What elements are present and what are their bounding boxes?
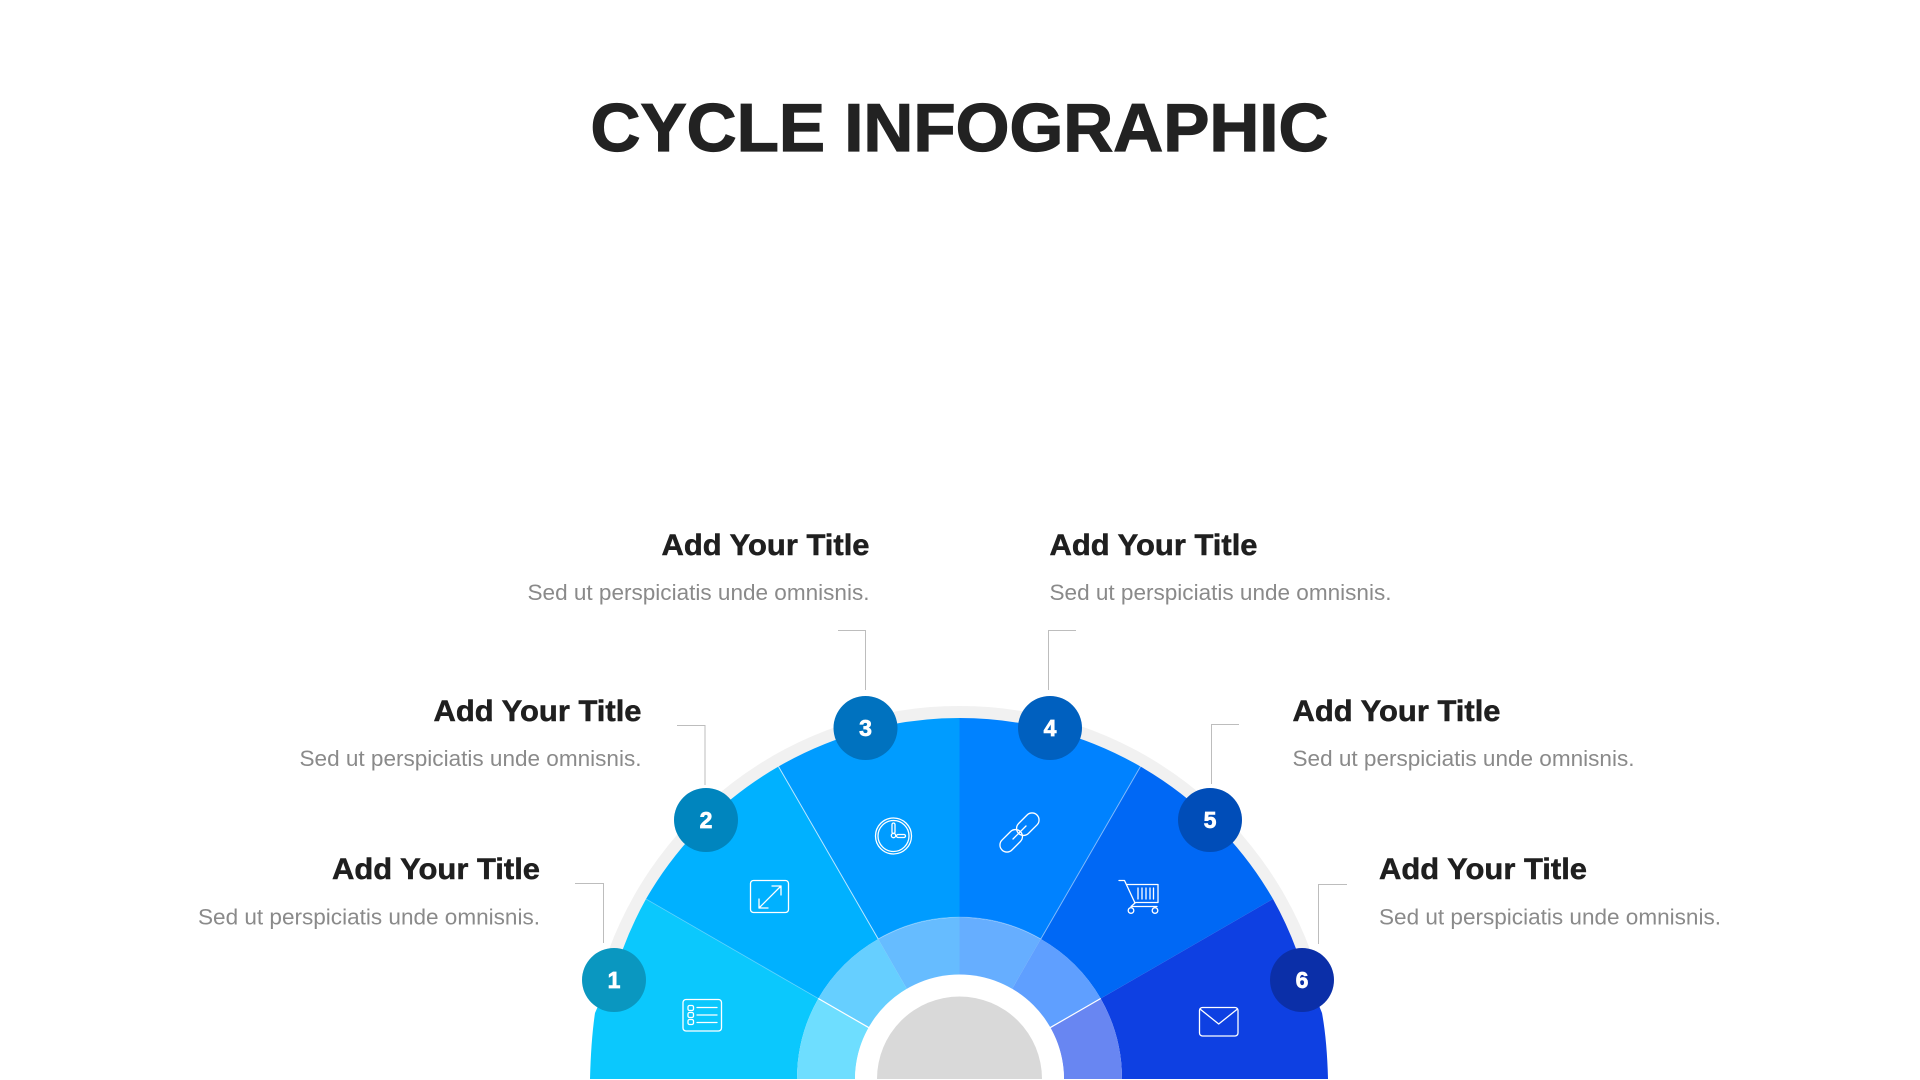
text block 4: Sed ut perspiciatis unde omnisnis. bbox=[1050, 580, 1392, 605]
segment 5 bbox=[1041, 766, 1273, 998]
icon: chain link bbox=[997, 810, 1042, 855]
text block 3 bbox=[528, 529, 870, 605]
inner ring segment 3 bbox=[878, 917, 960, 990]
text block 3: Add Your Title bbox=[662, 529, 870, 562]
segment 1 bbox=[590, 899, 818, 1079]
inner ring segment 4 bbox=[960, 917, 1041, 990]
badge 3 bbox=[834, 696, 898, 760]
badge 1 bbox=[582, 948, 646, 1012]
centre grey disc bbox=[877, 996, 1042, 1079]
segment 6 bbox=[1101, 899, 1328, 1079]
badge 5: 5 bbox=[1204, 807, 1217, 833]
text block 3: Sed ut perspiciatis unde omnisnis. bbox=[528, 580, 870, 605]
inner ring segment 2 bbox=[818, 939, 907, 1028]
text block 5: Add Your Title bbox=[1292, 695, 1500, 728]
connector 2 bbox=[677, 726, 705, 785]
text block 2: Add Your Title bbox=[434, 695, 642, 728]
centre white disc bbox=[855, 974, 1064, 1079]
text block 6: Sed ut perspiciatis unde omnisnis. bbox=[1379, 904, 1721, 930]
text block 6: Add Your Title bbox=[1379, 853, 1587, 886]
text block 1 bbox=[198, 853, 540, 930]
text block 2 bbox=[300, 695, 642, 771]
text block 4 bbox=[1050, 529, 1392, 605]
badge 4 bbox=[1018, 696, 1082, 760]
title: CYCLE INFOGRAPHIC bbox=[590, 90, 1328, 166]
connector 3 bbox=[838, 630, 866, 690]
connector 6 bbox=[1318, 884, 1347, 944]
inner ring segment 1 bbox=[797, 998, 869, 1079]
badge 5 bbox=[1178, 788, 1242, 852]
text block 2: Sed ut perspiciatis unde omnisnis. bbox=[300, 746, 642, 771]
inner ring segment 6 bbox=[1050, 998, 1122, 1079]
badge 4: 4 bbox=[1044, 715, 1057, 741]
text block 1: Add Your Title bbox=[332, 853, 540, 886]
text block 6 bbox=[1379, 853, 1721, 930]
icon: clock bbox=[876, 818, 912, 854]
segment 3 bbox=[778, 718, 960, 939]
text block 1: Sed ut perspiciatis unde omnisnis. bbox=[198, 904, 540, 930]
icon: envelope bbox=[1200, 1008, 1238, 1036]
badge 6: 6 bbox=[1296, 967, 1308, 993]
badge 1: 1 bbox=[608, 967, 621, 993]
text block 4: Add Your Title bbox=[1050, 529, 1258, 562]
inner ring segment 5 bbox=[1012, 939, 1101, 1028]
badge 3: 3 bbox=[859, 715, 872, 741]
segment 2 bbox=[646, 766, 878, 998]
icon: shopping cart bbox=[1119, 880, 1158, 913]
badge 6 bbox=[1270, 948, 1334, 1012]
segment 4 bbox=[960, 718, 1140, 939]
text block 5 bbox=[1292, 695, 1634, 771]
connector 1 bbox=[575, 884, 604, 943]
semicircle cycle diagram bbox=[590, 706, 1328, 1079]
connector 5 bbox=[1212, 724, 1239, 784]
badge 2 bbox=[674, 788, 738, 852]
icon: resize arrows bbox=[750, 880, 788, 912]
connector 4 bbox=[1048, 630, 1076, 690]
text block 5: Sed ut perspiciatis unde omnisnis. bbox=[1292, 746, 1634, 771]
icon: checklist bbox=[683, 1000, 722, 1031]
outer grey ring bbox=[599, 706, 1320, 980]
badge 2: 2 bbox=[700, 807, 712, 833]
